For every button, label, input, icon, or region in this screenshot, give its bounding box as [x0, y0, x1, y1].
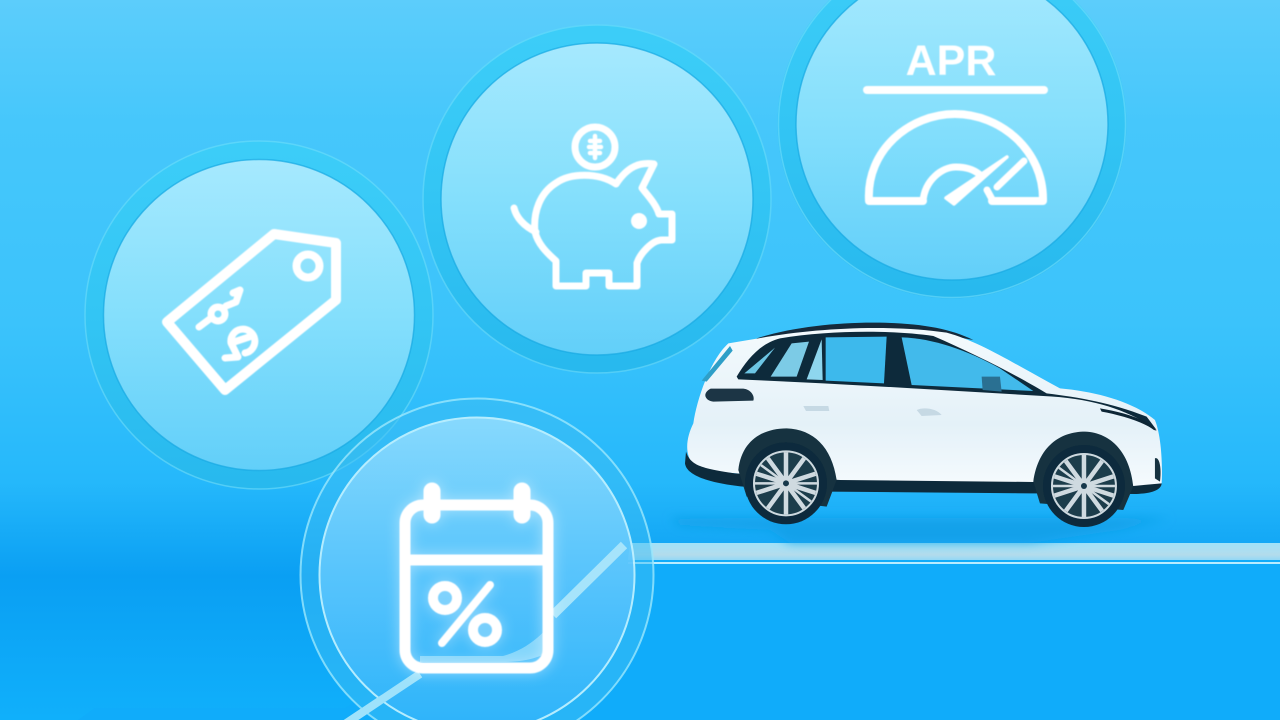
- car body: [687, 328, 1162, 488]
- car headlight: [1100, 408, 1157, 431]
- circle: APR gauge: [778, 0, 1126, 298]
- icon: price tag: [167, 234, 336, 390]
- front wheel: [1043, 445, 1125, 527]
- car wheel arches: [738, 428, 1133, 510]
- road: raised ramp and flat band: [78, 543, 1280, 720]
- car rear windscreen sliver: [702, 346, 733, 382]
- car lower trim: [685, 452, 1162, 494]
- rear wheel: [745, 442, 827, 524]
- circle: price tag: [85, 141, 433, 489]
- icon: calendar with percent sign: [405, 491, 548, 668]
- car tail light: [705, 389, 754, 402]
- icon: APR gauge: [867, 37, 1044, 204]
- label: APR: APR: [906, 37, 996, 85]
- car door handles: [803, 406, 942, 416]
- circle: piggy bank: [423, 25, 771, 373]
- car roof rail: [757, 323, 973, 340]
- circle: calendar percent: [300, 398, 654, 720]
- car rear side window: [744, 348, 775, 373]
- car quarter window: [771, 342, 809, 377]
- car front bumper detail: [1155, 458, 1161, 482]
- car shadow: [670, 518, 1170, 543]
- car mirror and cabin reflection: [982, 377, 1002, 392]
- car rear door window: [826, 337, 887, 383]
- car rear door glass small: [807, 339, 823, 380]
- car front door window: [902, 337, 1033, 391]
- car window surround: [737, 332, 1157, 430]
- icon: piggy bank: [514, 127, 672, 286]
- car: white SUV: [685, 323, 1162, 527]
